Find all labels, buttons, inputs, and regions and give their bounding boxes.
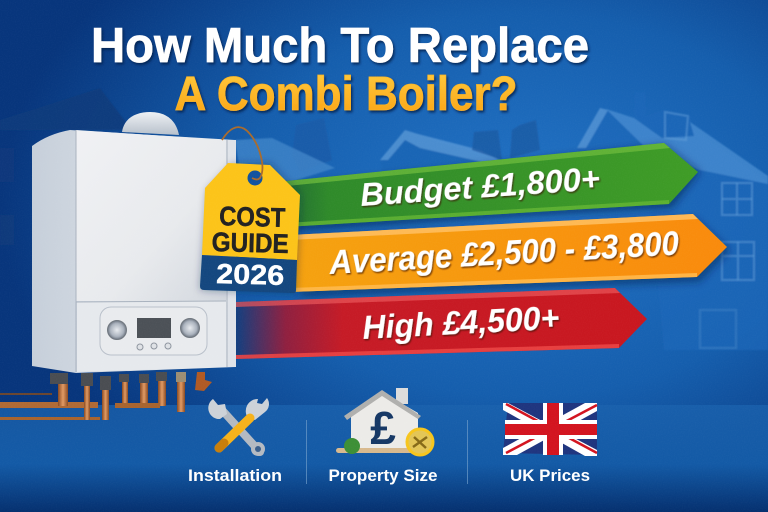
feature: installation <box>188 398 282 485</box>
right dial <box>180 318 200 338</box>
middle house silhouette <box>380 120 540 185</box>
label: installation: Installation <box>188 466 282 485</box>
title <box>91 19 589 121</box>
small house silhouette <box>235 118 335 182</box>
boiler <box>0 112 236 420</box>
title line 1: How Much To Replace <box>91 19 589 73</box>
tag hole <box>248 170 262 186</box>
pound sign: £ <box>370 402 396 454</box>
title line 2: A Combi Boiler? <box>174 68 518 121</box>
display <box>137 318 171 338</box>
tag text: cost: COST <box>219 201 286 233</box>
arrow: average <box>290 214 730 297</box>
icon: spanner and screwdriver <box>208 398 269 456</box>
casing <box>32 130 235 373</box>
dome <box>122 112 179 135</box>
arrow: high <box>236 288 647 359</box>
label: property size: Property Size <box>328 466 438 485</box>
feature: property size <box>328 388 438 485</box>
tag string <box>222 127 262 180</box>
feature row <box>188 388 597 485</box>
control panel <box>100 307 207 355</box>
label: high price: High £4,500+ <box>361 299 560 346</box>
tape measure badge <box>407 429 433 455</box>
price tag <box>200 127 300 294</box>
pipes <box>0 372 212 420</box>
label: budget price: Budget £1,800+ <box>359 160 601 213</box>
buttons <box>137 343 171 350</box>
feature: uk prices <box>503 403 597 485</box>
floor band <box>0 405 768 512</box>
icon: union flag <box>503 403 597 456</box>
label: average price: Average £2,500 - £3,800 <box>327 225 680 282</box>
tag text: guide: GUIDE <box>211 227 289 259</box>
plant <box>344 438 360 454</box>
tag text: year: 2026 <box>216 258 285 291</box>
background houses <box>0 88 768 350</box>
left dial <box>108 320 126 340</box>
label: uk prices: UK Prices <box>510 466 590 485</box>
left house silhouette <box>0 88 132 245</box>
arrow: budget <box>236 143 700 232</box>
large house silhouette <box>577 92 768 350</box>
price arrows <box>236 143 730 359</box>
